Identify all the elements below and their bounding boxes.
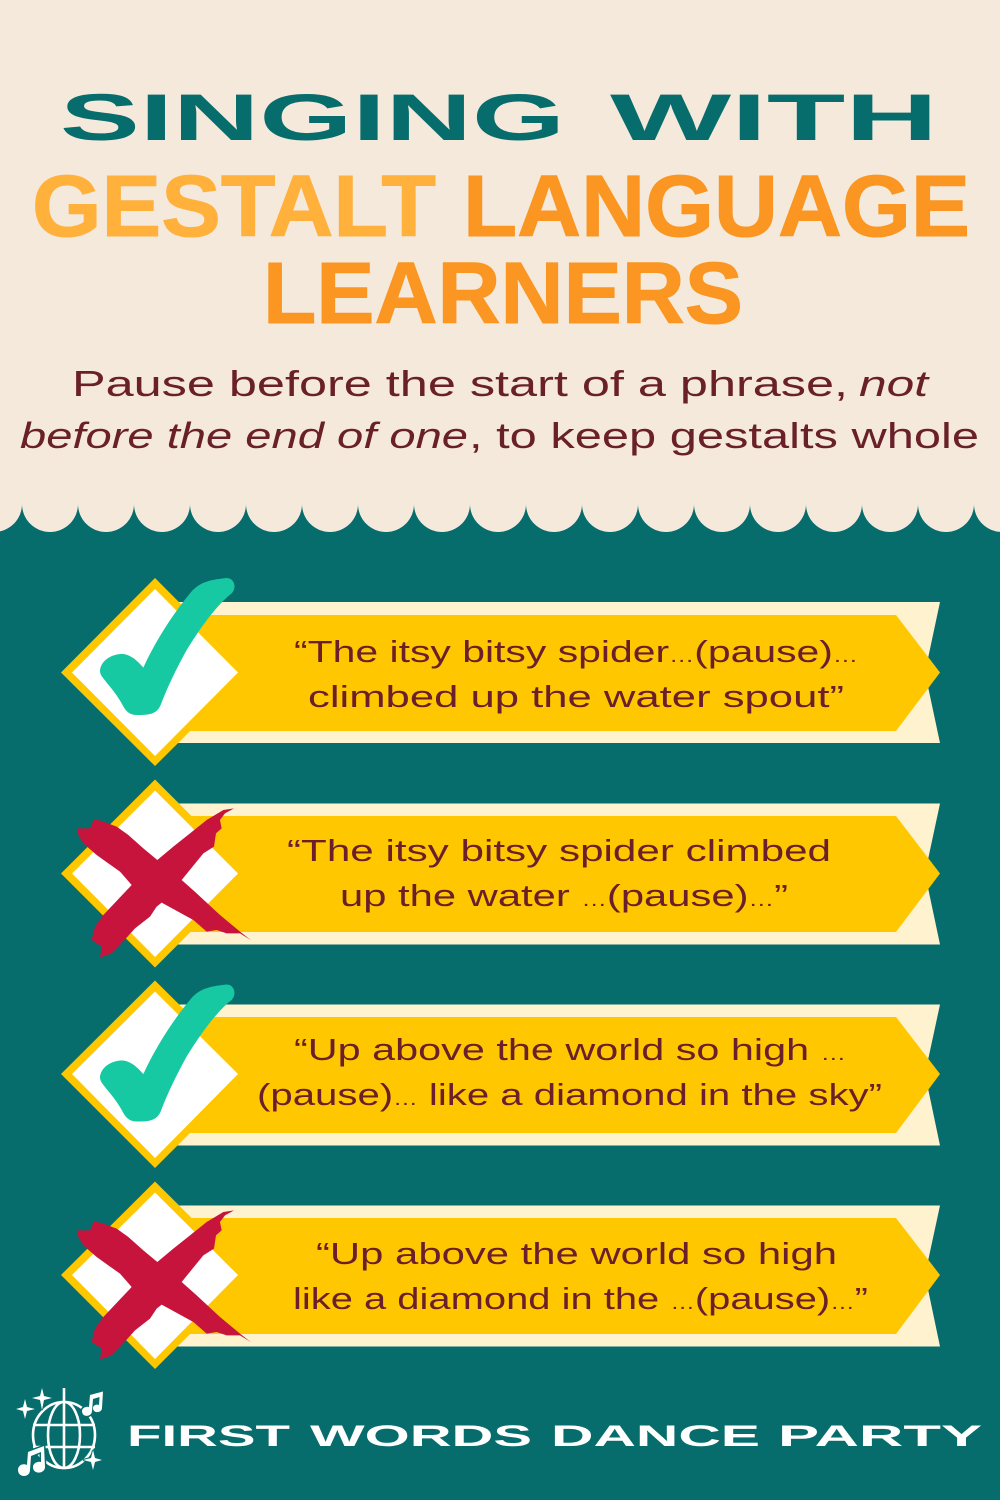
- subtitle: before the end of one: [20, 415, 468, 456]
- subtitle: Pause before the start of a phrase,: [72, 363, 848, 404]
- icon: check mark: [100, 578, 234, 715]
- ribbon front: [160, 1017, 940, 1133]
- ribbon front: [160, 1218, 940, 1334]
- diamond: [61, 1182, 249, 1369]
- ribbon back: [160, 1004, 940, 1146]
- background: teal body with scalloped edge: [0, 504, 1000, 1500]
- row 4: incorrect example: [61, 1182, 940, 1369]
- footer brand text: [127, 1420, 982, 1453]
- subtitle: , to keep gestalts whole: [469, 415, 979, 456]
- title: [32, 80, 970, 342]
- quote text: [257, 1032, 882, 1112]
- title line: language: LANGUAGE: [463, 158, 970, 255]
- quote text: “Up above the world so high: [316, 1236, 837, 1271]
- title line: learners: LEARNERS: [263, 245, 743, 342]
- background: beige header: [0, 0, 1000, 505]
- icon: red cross: [77, 1210, 251, 1360]
- quote text: [293, 1236, 868, 1316]
- quote text: “The itsy bitsy spider …(pause) …: [294, 634, 858, 669]
- diamond: [61, 780, 249, 968]
- icon: top music note: [82, 1392, 103, 1416]
- diamond: [61, 980, 249, 1168]
- quote text: up the water …(pause) …”: [340, 878, 788, 913]
- quote text: [287, 833, 831, 913]
- ribbon front: [160, 615, 940, 731]
- icon: bottom music note: [18, 1446, 45, 1476]
- icon: check mark: [100, 984, 234, 1121]
- ribbon back: [160, 804, 940, 944]
- subtitle: [20, 363, 979, 456]
- icon: red cross: [77, 808, 251, 958]
- title word: singing: SINGING: [60, 80, 565, 154]
- row 2: incorrect example: [61, 780, 940, 968]
- ribbon front: [160, 816, 940, 932]
- title line: gestalt: GESTALT: [32, 158, 436, 255]
- title word: with: WITH: [610, 80, 938, 154]
- footer brand text: DANCE: [551, 1420, 760, 1453]
- quote text: “Up above the world so high …: [294, 1032, 846, 1067]
- icon: globe with music notes and sparkles: [16, 1388, 103, 1476]
- row 3: correct example: [61, 980, 940, 1168]
- footer brand text: WORDS: [310, 1420, 532, 1453]
- quote text: like a diamond in the …(pause) …”: [293, 1281, 868, 1316]
- quote text: (pause) … like a diamond in the sky”: [257, 1077, 882, 1112]
- diamond: [61, 578, 249, 766]
- ribbon back: [160, 602, 940, 743]
- quote text: “The itsy bitsy spider climbed: [287, 833, 831, 868]
- footer brand text: PARTY: [778, 1420, 982, 1453]
- quote text: [294, 634, 858, 714]
- subtitle: not: [859, 363, 931, 404]
- row 1: correct example: [61, 578, 940, 766]
- icon: sparkles: [16, 1388, 102, 1470]
- footer brand text: FIRST: [127, 1420, 290, 1453]
- ribbon back: [160, 1206, 940, 1346]
- quote text: climbed up the water spout”: [308, 679, 844, 714]
